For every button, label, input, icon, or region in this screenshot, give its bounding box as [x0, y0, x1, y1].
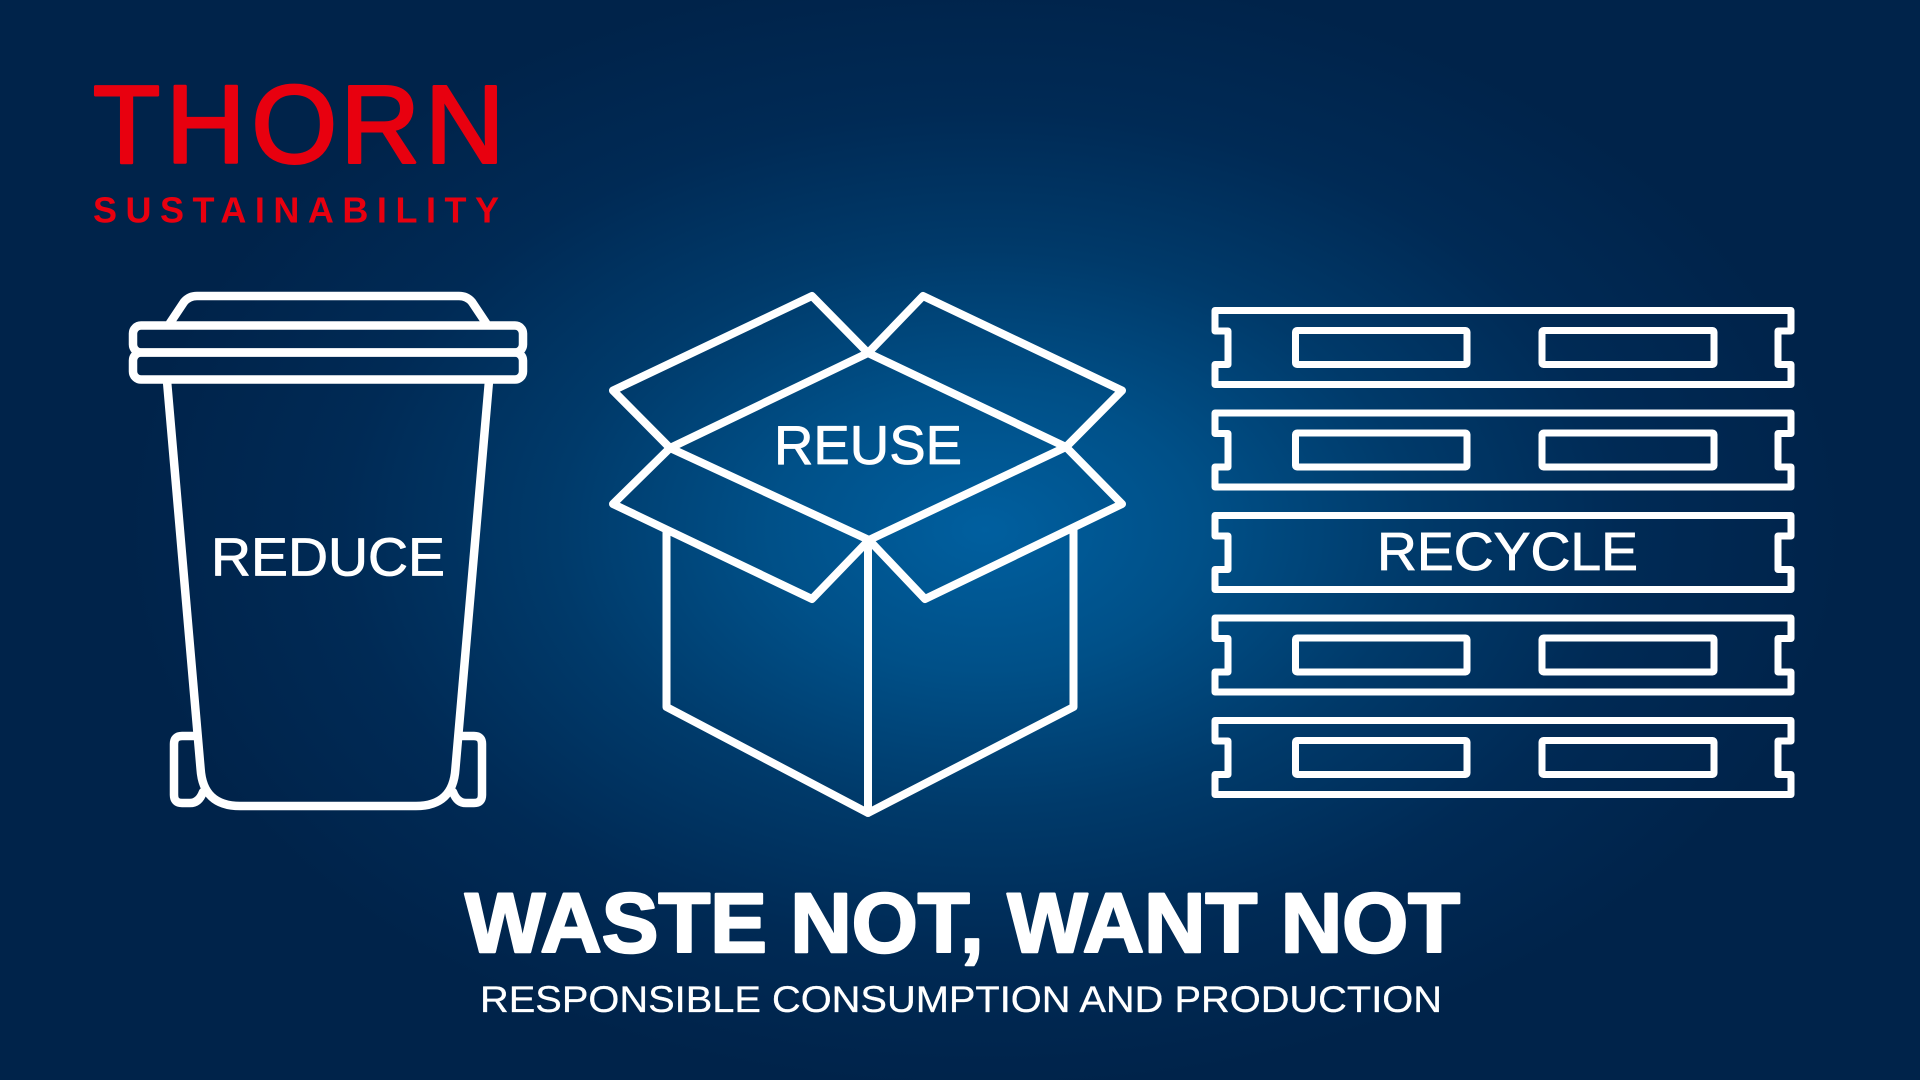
- pallet plank 2: [1215, 413, 1791, 487]
- subtitle: RESPONSIBLE CONSUMPTION AND PRODUCTION: [480, 979, 1442, 1020]
- pallet plank 4: [1215, 618, 1791, 692]
- title: WASTE NOT, WANT NOT: [465, 876, 1460, 970]
- pallet plank 1: [1215, 310, 1791, 384]
- bin lid top: [170, 296, 486, 323]
- icon: wheelie bin (reduce): [133, 296, 523, 806]
- bin lid rails: [133, 326, 523, 380]
- logo wordmark: THORN: [93, 64, 504, 186]
- box top flaps: [613, 296, 1122, 448]
- pallet plank 5: [1215, 720, 1791, 794]
- logo tagline: SUSTAINABILITY: [93, 190, 499, 230]
- label: recycle: RECYCLE: [1377, 522, 1638, 582]
- box body: [666, 530, 1074, 813]
- bin body: [167, 381, 489, 806]
- box opening: [670, 353, 1066, 540]
- logo: Thorn Sustainability: [93, 64, 504, 230]
- icon: open cardboard box (reuse): [613, 296, 1122, 813]
- label: reduce: REDUCE: [211, 528, 445, 588]
- box lower flaps: [613, 447, 1122, 599]
- icon: stacked pallets (recycle): [1215, 310, 1791, 794]
- pallet plank 3 with label: [1215, 516, 1791, 590]
- label: reuse: REUSE: [774, 414, 962, 476]
- bin wheels: [174, 736, 482, 803]
